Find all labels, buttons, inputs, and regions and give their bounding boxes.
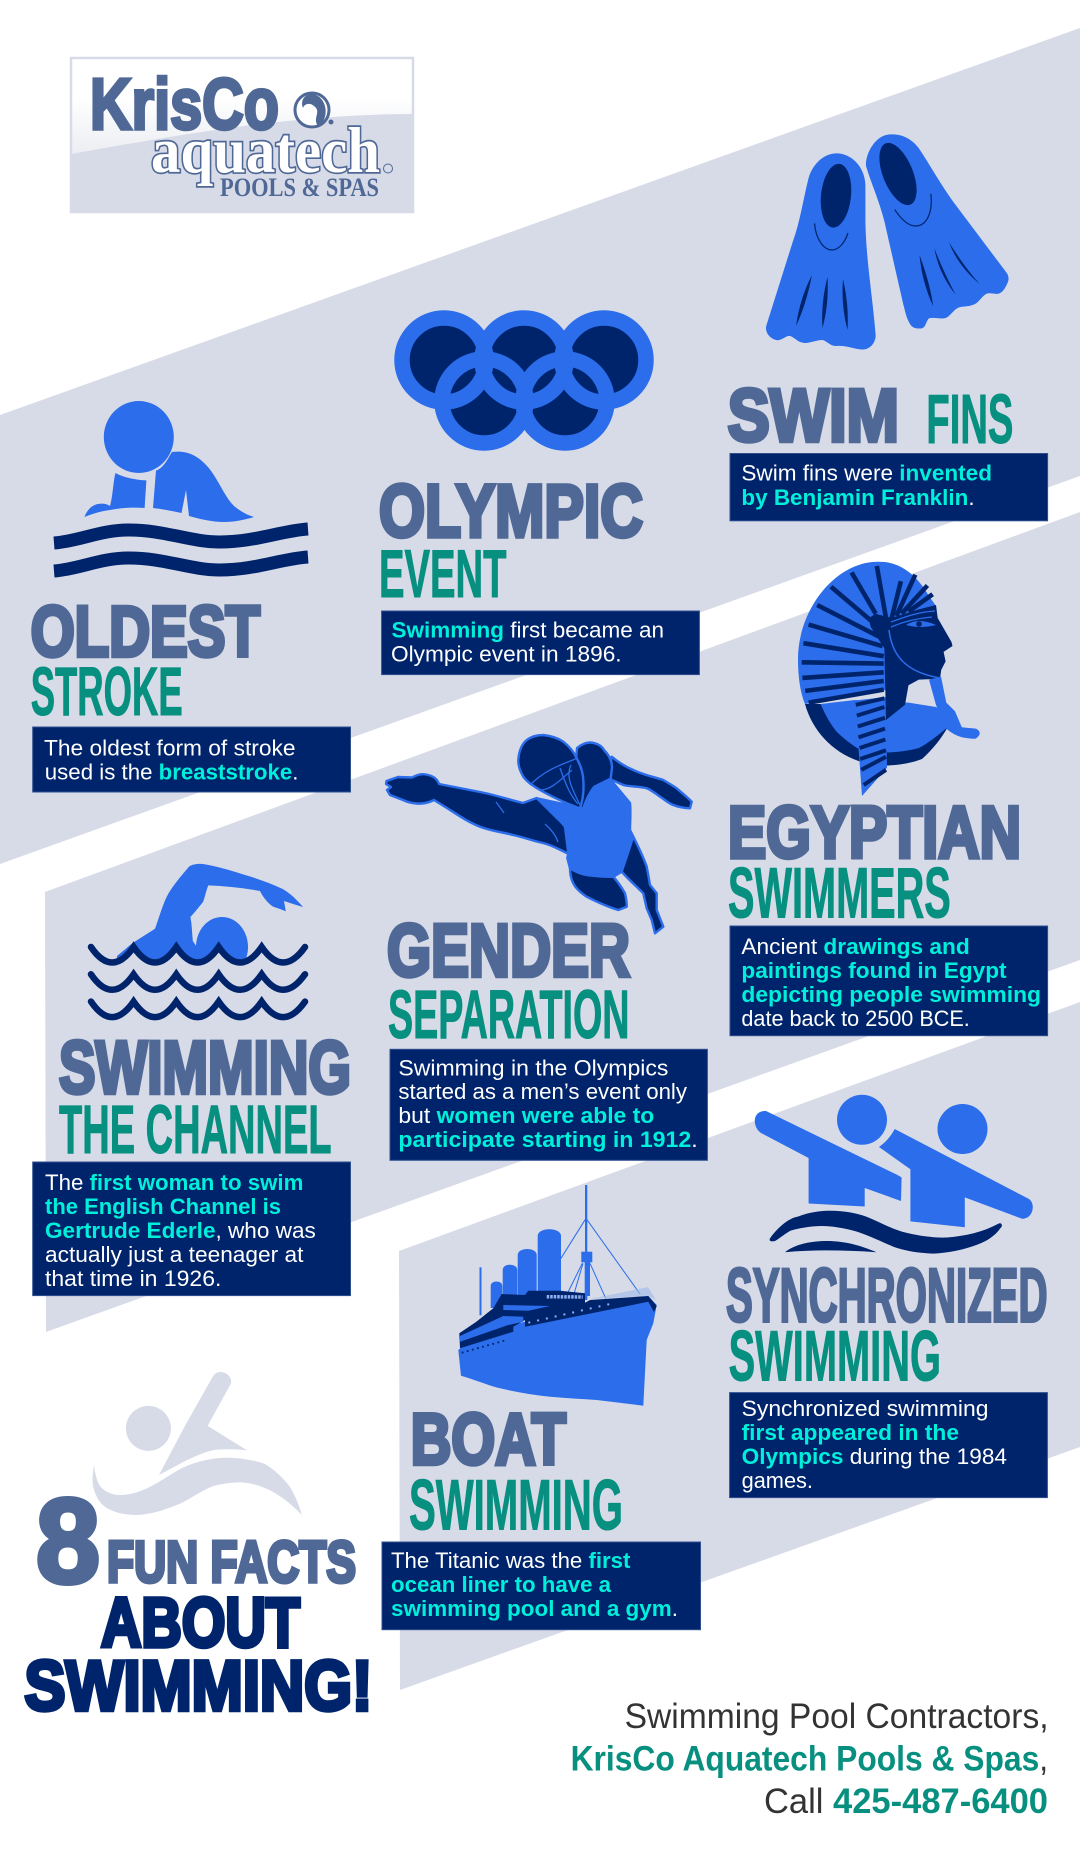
heading: swimming: SWIMMING xyxy=(59,1025,351,1109)
heading: separation: SEPARATION xyxy=(388,976,630,1053)
text block: gender fact: started as a men’s event only xyxy=(398,1079,687,1104)
text block: boat fact: The Titanic was the first xyxy=(391,1548,631,1573)
heading: swim: SWIM xyxy=(728,374,899,457)
text block: oldest stroke fact: used is the breaststroke. xyxy=(45,760,298,785)
icon: ocean liner xyxy=(458,1185,657,1406)
icon: female swimmer diving xyxy=(386,735,692,933)
text block: channel fact: The first woman to swim xyxy=(45,1170,303,1195)
text block: synchronized fact xyxy=(730,1393,1047,1498)
heading: gender: GENDER xyxy=(387,908,630,992)
text block: egyptian fact: paintings found in Egypt xyxy=(741,958,1007,983)
text block: swim fins fact xyxy=(730,454,1048,521)
icon: freestyle swimmer and waves xyxy=(91,864,305,1017)
text block: channel fact: actually just a teenager at xyxy=(45,1242,303,1267)
logo: KrisCo Aquatech: POOLS & SPAS xyxy=(220,173,379,202)
panel: gender separation xyxy=(386,735,707,1160)
logo: KrisCo Aquatech: aquatech xyxy=(151,115,380,187)
text block: egyptian fact: date back to 2500 BCE. xyxy=(741,1006,970,1031)
icon: synchronized swimmers xyxy=(755,1095,1033,1254)
icon: olympic rings xyxy=(400,316,648,445)
title block: 8 fun facts about swimming xyxy=(24,1372,372,1725)
heading: boat: BOAT xyxy=(411,1399,566,1480)
text block: olympic fact: Swimming first became an xyxy=(392,618,664,643)
text block: gender fact xyxy=(390,1049,707,1160)
footer: contact call to action: Swimming Pool Contractors, xyxy=(625,1697,1049,1736)
footer: contact call to action xyxy=(571,1697,1049,1821)
icon: swim fins xyxy=(766,134,1009,350)
text block: gender fact: participate starting in 1912 . xyxy=(398,1127,698,1152)
text block: oldest stroke fact: The oldest form of stroke xyxy=(44,736,296,761)
heading: the channel: THE CHANNEL xyxy=(59,1091,332,1168)
text block: boat fact: swimming pool and a gym . xyxy=(391,1596,678,1621)
text block: olympic fact xyxy=(382,611,699,675)
heading: swimming!: SWIMMING! xyxy=(24,1646,372,1725)
text block: channel fact: that time in 1926. xyxy=(45,1266,221,1291)
text block: egyptian fact xyxy=(730,926,1048,1036)
text block: oldest stroke fact xyxy=(33,727,350,792)
heading: event: EVENT xyxy=(379,536,506,612)
logo: KrisCo Aquatech xyxy=(71,58,413,212)
panel: egyptian swimmers xyxy=(728,562,1048,1036)
footer: contact call to action: Call 425-487-6400 xyxy=(764,1782,1048,1821)
heading: swimming: SWIMMING xyxy=(409,1466,623,1546)
icon: pharaoh head xyxy=(798,562,980,796)
text block: swim fins fact: Swim fins were invented xyxy=(741,460,992,485)
text block: gender fact: but women were able to xyxy=(398,1103,654,1128)
text block: channel fact xyxy=(33,1162,350,1296)
text block: olympic fact: Olympic event in 1896. xyxy=(391,641,622,666)
heading: oldest: OLDEST xyxy=(31,592,260,672)
heading: olympic: OLYMPIC xyxy=(379,469,643,552)
heading: fun facts: FUN FACTS xyxy=(107,1530,356,1595)
panel: synchronized swimming xyxy=(726,1095,1048,1498)
panel: swimming the channel xyxy=(33,864,351,1296)
text block: egyptian fact: depicting people swimming xyxy=(741,982,1041,1007)
text block: swim fins fact: by Benjamin Franklin. xyxy=(741,485,975,510)
panel: boat swimming xyxy=(382,1185,700,1630)
text block: synchronized fact: first appeared in the xyxy=(742,1420,959,1445)
text block: channel fact: the English Channel is xyxy=(45,1194,281,1219)
text block: boat fact xyxy=(382,1542,700,1630)
footer: contact call to action: KrisCo Aquatech Pools & Spas, xyxy=(571,1740,1048,1779)
text block: synchronized fact: Olympics during the 1984 xyxy=(742,1444,1007,1469)
heading: 8: 8 xyxy=(36,1474,100,1608)
icon: breaststroke swimmer xyxy=(54,401,308,571)
text block: boat fact: ocean liner to have a xyxy=(391,1572,612,1597)
text block: channel fact: Gertrude Ederle, who was xyxy=(45,1218,316,1243)
text block: gender fact: Swimming in the Olympics xyxy=(398,1055,668,1080)
panel: olympic event xyxy=(379,316,699,675)
heading: stroke: STROKE xyxy=(31,653,183,730)
panel: oldest stroke xyxy=(31,401,350,792)
text block: egyptian fact: Ancient drawings and xyxy=(741,934,970,959)
text block: synchronized fact: Synchronized swimming xyxy=(742,1396,988,1421)
panel: swim fins xyxy=(728,134,1048,521)
heading: about: ABOUT xyxy=(101,1584,300,1662)
icon: swimmer emblem xyxy=(93,1372,302,1515)
logo: KrisCo Aquatech: KrisCo xyxy=(90,65,279,145)
text block: synchronized fact: games. xyxy=(742,1468,813,1493)
